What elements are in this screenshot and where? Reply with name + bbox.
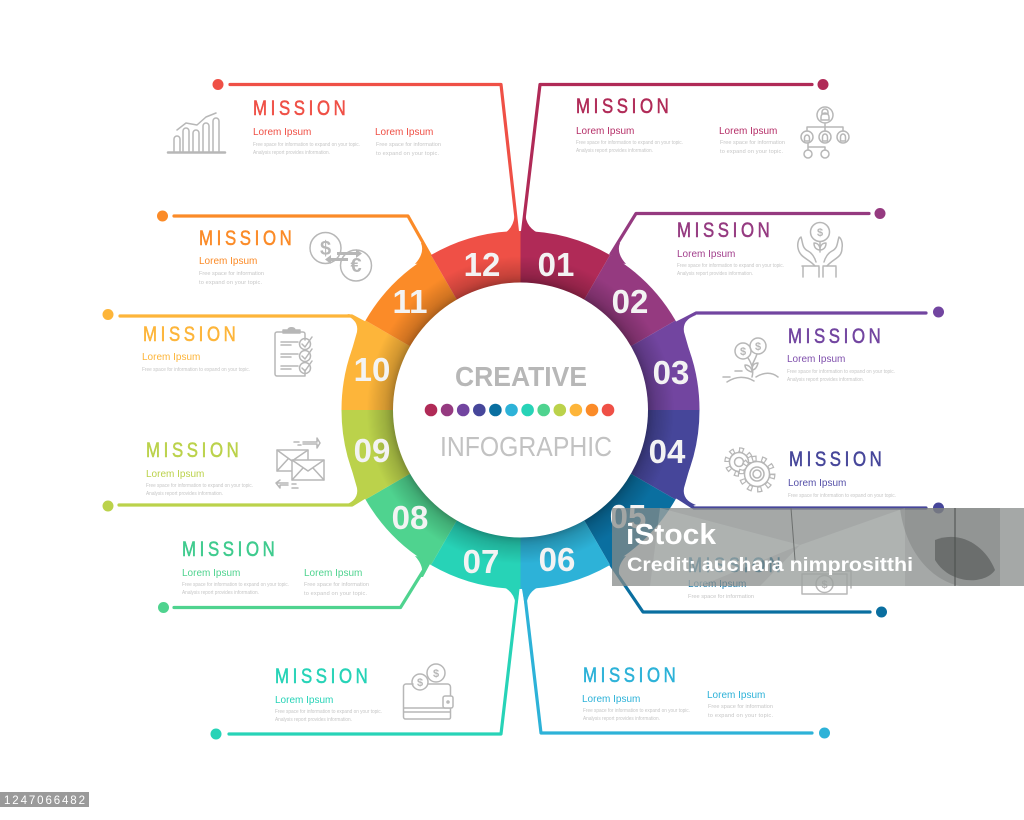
watermark band — [612, 508, 1024, 586]
text block 01 right — [719, 126, 785, 155]
connector flare 06 — [521, 583, 546, 604]
text block 03: Lorem Ipsum — [787, 354, 845, 365]
icon: envelopes — [276, 438, 324, 488]
segment 02 — [520, 255, 676, 410]
panel: mission 08 — [158, 538, 430, 613]
icon: checklist clipboard — [275, 328, 312, 376]
text block 12 right: Free space for information — [376, 142, 441, 148]
icon: wallet with coins — [404, 664, 453, 719]
segment 09 — [342, 410, 520, 500]
connector flare 11 — [415, 243, 430, 264]
connector flare 02 — [611, 243, 626, 264]
dot 09 — [102, 500, 114, 512]
text block 12 left: Free space for information to expand on your topic. — [253, 142, 360, 148]
heading 02: MISSION — [677, 219, 770, 243]
text block 03: Free space for information to expand on your topic. — [787, 369, 895, 375]
connector flare 04 — [675, 467, 696, 506]
segment numbers: 05 — [610, 498, 646, 535]
segment 11 — [366, 255, 520, 410]
text block 11 — [199, 256, 264, 286]
text block 08 right — [304, 568, 369, 597]
segment numbers: 10 — [354, 351, 390, 388]
connector 07 — [229, 588, 518, 734]
text block 06 right: Free space for information — [708, 704, 773, 710]
text block 05: Lorem Ipsum — [688, 579, 746, 590]
text block 05: Free space for information — [688, 594, 754, 600]
text block 12 right: to expand on your topic. — [376, 151, 439, 157]
segment 10 — [342, 320, 520, 410]
text block 04 — [788, 478, 896, 499]
connector 11 — [174, 216, 430, 255]
segment numbers: 07 — [463, 543, 499, 580]
text block 04: Free space for information to expand on your topic. — [788, 493, 896, 499]
text block 10: Free space for information to expand on your topic. — [142, 367, 250, 373]
text block 06 left: Free space for information to expand on your topic. — [583, 708, 690, 714]
heading 10: MISSION — [143, 323, 236, 347]
icon: currency exchange — [310, 232, 372, 281]
connector 06 — [524, 588, 812, 733]
text block 01 right: Lorem Ipsum — [719, 126, 777, 137]
text block 06 right: to expand on your topic. — [708, 713, 773, 719]
center title: creative: CREATIVE — [455, 361, 587, 392]
text block 03 — [787, 354, 895, 383]
text block 08 right: Free space for information — [304, 582, 369, 588]
text block 11: Lorem Ipsum — [199, 256, 257, 267]
watermark credit: Credit: auchara nimprositthi — [627, 555, 913, 576]
text block 06 right — [707, 690, 773, 719]
text block 08 left: Free space for information to expand on your topic. — [182, 582, 289, 588]
text block 11: Free space for information — [199, 271, 264, 277]
connector flare 09 — [345, 467, 366, 506]
panel: mission 06 — [521, 583, 830, 738]
connector flare 03 — [675, 314, 696, 353]
heading 07: MISSION — [275, 665, 368, 689]
segment 12 — [431, 231, 520, 410]
heading 08: MISSION — [182, 538, 275, 562]
text block 03: Analysis report provides information. — [787, 377, 864, 383]
dot 04 — [933, 502, 944, 514]
panel: mission 03 — [675, 306, 944, 383]
text block 11: to expand on your topic. — [199, 280, 262, 286]
segment numbers: 11 — [393, 283, 427, 320]
connector 04 — [677, 497, 926, 508]
heading 11: MISSION — [199, 227, 292, 251]
icon: hands with plant — [798, 222, 842, 277]
icon: currency exchange: € — [350, 255, 362, 277]
panel: mission 09 — [102, 438, 366, 512]
panel: mission 07 — [210, 583, 520, 740]
segment numbers — [354, 246, 689, 580]
panel: mission 10 — [102, 309, 366, 376]
text block 09 — [146, 469, 253, 497]
ring of twelve segments — [342, 231, 700, 589]
segment 05 — [520, 410, 676, 565]
text block 06 left: Lorem Ipsum — [582, 694, 640, 705]
text block 01 left — [576, 126, 683, 154]
panel: mission 04 — [675, 448, 944, 514]
connector 03 — [677, 313, 926, 323]
segment numbers: 02 — [612, 283, 648, 320]
text block 12 left: Analysis report provides information. — [253, 150, 330, 156]
text block 10 — [142, 352, 250, 373]
dot 05 — [876, 606, 887, 618]
heading 12: MISSION — [253, 97, 346, 121]
center title: infographic: INFOGRAPHIC — [440, 431, 612, 462]
text block 05 — [688, 579, 754, 600]
text block 06 left: Analysis report provides information. — [583, 716, 660, 722]
connector 02 — [611, 214, 869, 254]
text block 12 right — [375, 127, 441, 157]
heading 04: MISSION — [789, 448, 882, 472]
segment 06 — [520, 410, 610, 589]
text block 12 left: Lorem Ipsum — [253, 127, 311, 138]
text block 01 left: Lorem Ipsum — [576, 126, 634, 137]
text block 06 right: Lorem Ipsum — [707, 690, 765, 701]
heading 01: MISSION — [576, 95, 669, 119]
dot 12 — [212, 79, 224, 90]
connector flare 01 — [521, 216, 546, 237]
text block 02: Free space for information to expand on your topic. — [677, 263, 784, 269]
segment numbers: 03 — [653, 354, 689, 391]
icon: currency exchange: $ — [320, 238, 331, 260]
text block 10: Lorem Ipsum — [142, 352, 200, 363]
segment 01 — [520, 231, 610, 410]
connector flare 10 — [345, 314, 366, 353]
text block 02: Lorem Ipsum — [677, 249, 735, 260]
text block 01 right: Free space for information — [720, 140, 785, 146]
icon: wallet with coins: $ — [433, 668, 439, 680]
segment 08 — [366, 410, 520, 565]
panel: mission 02 — [611, 208, 886, 277]
segment 04 — [520, 410, 700, 500]
text block 01 left: Analysis report provides information. — [576, 148, 653, 154]
icon: banknotes — [802, 571, 851, 594]
icon: gears — [727, 450, 772, 490]
connector flare 12 — [499, 216, 520, 237]
connector 01 — [522, 84, 812, 232]
icon: money plant — [723, 338, 778, 382]
text block 09: Lorem Ipsum — [146, 469, 204, 480]
heading 05: MISSION — [688, 554, 781, 578]
segment numbers: 08 — [392, 499, 428, 536]
text block 08 right: Lorem Ipsum — [304, 568, 362, 579]
dot 10 — [102, 309, 114, 320]
icon: money plant: $ — [755, 341, 761, 353]
connector 09 — [119, 497, 365, 505]
center circle — [392, 282, 648, 538]
connector 10 — [120, 316, 365, 323]
segment numbers: 09 — [354, 432, 390, 469]
text block 06 left — [582, 694, 690, 722]
dot 06 — [819, 728, 830, 738]
icon: org chart — [801, 107, 849, 158]
text block 07: Lorem Ipsum — [275, 695, 333, 706]
text block 02: Analysis report provides information. — [677, 271, 753, 277]
icon: hands with plant: $ — [817, 227, 823, 239]
segment numbers: 01 — [538, 246, 574, 283]
connector flare 08 — [415, 556, 430, 577]
text block 09: Free space for information to expand on your topic. — [146, 483, 253, 489]
text block 01 left: Free space for information to expand on your topic. — [576, 140, 683, 146]
dot 03 — [933, 306, 944, 318]
panel: mission 01 — [521, 79, 849, 237]
image id label: 1247066482 — [4, 795, 85, 807]
segment numbers: 04 — [649, 433, 686, 470]
connector 05 — [611, 565, 870, 612]
text block 12 left — [253, 127, 360, 156]
icon: banknotes: $ — [821, 579, 828, 591]
text block 12 right: Lorem Ipsum — [375, 127, 433, 138]
connector flare 07 — [496, 583, 520, 604]
text block 08 left: Lorem Ipsum — [182, 568, 240, 579]
connector 08 — [174, 563, 428, 608]
panel: mission 05 — [611, 554, 887, 618]
segment 03 — [520, 320, 700, 410]
text block 08 left: Analysis report provides information. — [182, 590, 259, 596]
dot 02 — [874, 208, 886, 219]
text block 08 left — [182, 568, 289, 596]
heading 06: MISSION — [583, 664, 676, 688]
text block 09: Analysis report provides information. — [146, 491, 223, 497]
dot 11 — [157, 210, 168, 222]
dot 08 — [158, 602, 169, 613]
segment numbers: 12 — [464, 246, 500, 283]
heading 09: MISSION — [146, 439, 239, 463]
colour dots row — [425, 404, 614, 416]
text block 04: Lorem Ipsum — [788, 478, 846, 489]
text block 07 — [275, 695, 382, 723]
text block 02 — [677, 249, 784, 277]
segment 07 — [431, 410, 520, 589]
icon: bar chart — [168, 113, 225, 152]
segment numbers: 06 — [539, 541, 575, 578]
panel: mission 11 — [157, 210, 430, 286]
dot 01 — [818, 79, 828, 90]
icon: wallet with coins: $ — [417, 677, 423, 689]
icon: money plant: $ — [740, 346, 746, 358]
connector flare 05 — [611, 556, 626, 577]
text block 01 right: to expand on your topic. — [720, 149, 783, 155]
text block 07: Free space for information to expand on your topic. — [275, 709, 382, 715]
text block 08 right: to expand on your topic. — [304, 591, 367, 597]
heading 03: MISSION — [788, 325, 881, 349]
text block 07: Analysis report provides information. — [275, 717, 352, 723]
connector 12 — [230, 84, 518, 232]
dot 07 — [210, 728, 222, 740]
panel: mission 12 — [168, 79, 520, 237]
watermark brand: iStock — [626, 519, 717, 551]
